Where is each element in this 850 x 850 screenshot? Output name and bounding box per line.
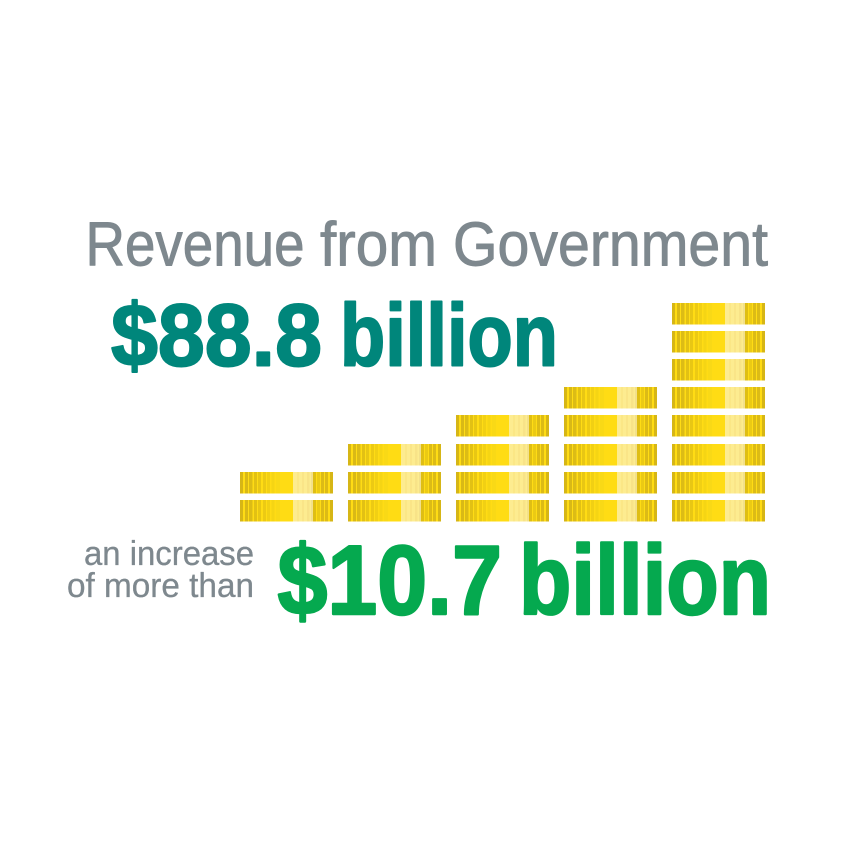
headline figure: $88.8 billion [111, 286, 558, 384]
increase label: an increase [84, 535, 254, 573]
increase label: of more than [67, 567, 254, 605]
title [86, 210, 768, 280]
stack 3 [456, 415, 549, 522]
headline figure: $88.8 billion: billion [340, 286, 558, 384]
stack 1 [240, 472, 333, 522]
increase label [67, 535, 254, 605]
increase figure: $10.7 billion: $10.7 [278, 525, 502, 635]
stack 4 [564, 387, 657, 522]
increase figure: $10.7 billion [278, 525, 771, 635]
increase figure: $10.7 billion: billion [519, 525, 771, 635]
headline figure: $88.8 billion: $88.8 [111, 286, 322, 384]
stack 2 [348, 444, 441, 522]
title: from [320, 210, 437, 280]
coin stack chart [240, 303, 765, 522]
stack 5 [672, 303, 765, 522]
title: Revenue [86, 210, 304, 280]
title: Government [453, 210, 768, 280]
